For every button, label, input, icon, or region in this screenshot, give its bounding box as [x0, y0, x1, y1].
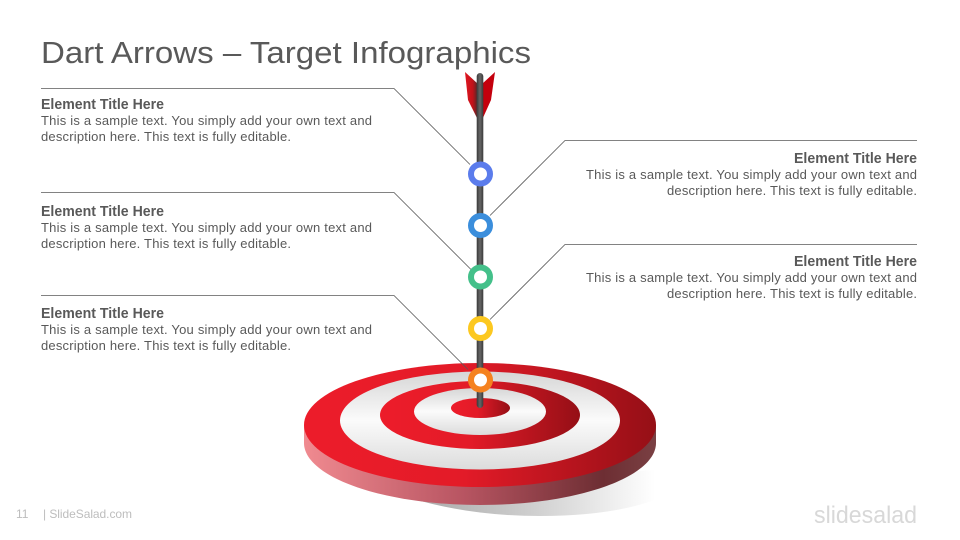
marker: blue: [471, 164, 490, 184]
marker: yellow: [471, 319, 490, 338]
text block: left 1: description here. This text is fully editable.: [41, 129, 291, 144]
target white ring: [340, 372, 620, 470]
target side: [304, 425, 656, 505]
arrow shaft: [477, 73, 483, 408]
text block: left 3: description here. This text is fully editable.: [41, 338, 291, 353]
text block: right 1: Element Title Here: [794, 151, 917, 167]
text block: right 1: description here. This text is fully editable.: [667, 183, 917, 198]
title: Dart Arrows – Target Infographics: [41, 35, 531, 70]
left feather: [465, 72, 478, 120]
right feather: [482, 72, 495, 120]
dart arrow: [465, 72, 495, 408]
text block: right 2: description here. This text is fully editable.: [667, 286, 917, 301]
text block: left 3: This is a sample text. You simply add your own text and: [41, 322, 372, 337]
connector: right 1: [490, 140, 917, 216]
connector: left 3: [41, 296, 468, 370]
text block: left 2: [41, 204, 372, 251]
text block: left 2: Element Title Here: [41, 204, 164, 220]
marker: green: [471, 268, 490, 286]
connector: left 1: [41, 88, 470, 164]
text block: left 2: description here. This text is fully editable.: [41, 236, 291, 251]
target inner red ring: [380, 381, 580, 449]
text block: right 2: Element Title Here: [794, 254, 917, 270]
target shadow: [410, 470, 655, 516]
text block: right 1: This is a sample text. You simply add your own text and: [586, 167, 917, 182]
text block: left 3: Element Title Here: [41, 306, 164, 322]
text block: left 2: This is a sample text. You simply add your own text and: [41, 220, 372, 235]
target outer red ring: [304, 363, 656, 487]
text block: right 2: [586, 254, 917, 301]
footer page number: 11: [16, 507, 29, 521]
text block: left 1: [41, 97, 372, 144]
text block: right 1: [586, 151, 917, 198]
connector: left 2: [41, 192, 471, 270]
connector: right 2: [490, 244, 917, 320]
marker: orange: [471, 370, 490, 390]
target bullseye: [451, 398, 510, 418]
footer logo: slidesalad: [814, 502, 917, 529]
target inner white ring: [414, 388, 546, 435]
marker: light blue: [471, 216, 490, 235]
footer site name: | SlideSalad.com: [43, 507, 132, 521]
text block: left 1: This is a sample text. You simply add your own text and: [41, 113, 372, 128]
text block: left 3: [41, 306, 372, 353]
text block: left 1: Element Title Here: [41, 97, 164, 113]
text block: right 2: This is a sample text. You simply add your own text and: [586, 270, 917, 285]
target board: [304, 363, 656, 516]
